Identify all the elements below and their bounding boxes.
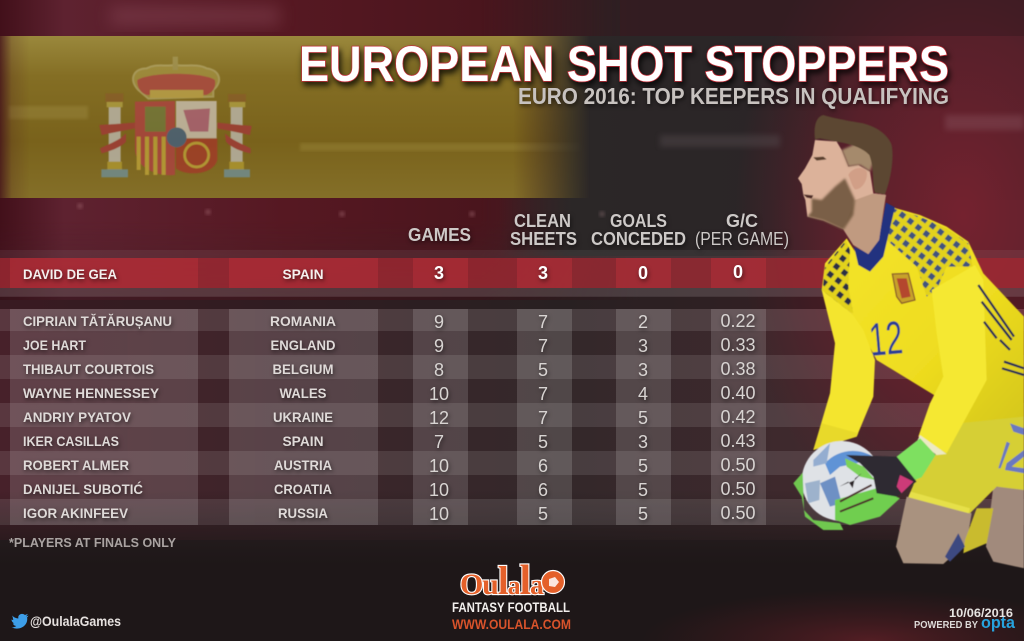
row: Hennessey: 10 xyxy=(429,384,449,404)
hair xyxy=(815,115,893,194)
right arm xyxy=(918,265,987,453)
row: Subotić: 5 xyxy=(638,480,648,500)
hair fade xyxy=(842,143,875,172)
row: Subotić: CROATIA xyxy=(274,481,332,497)
icon: football xyxy=(542,570,564,594)
shirt number 12: 12 xyxy=(867,311,905,366)
cuff highlight xyxy=(813,423,858,450)
row: Pyatov: ANDRIY PYATOV xyxy=(23,409,132,425)
table column cells xyxy=(10,258,766,525)
row: Courtois: BELGIUM xyxy=(272,361,334,377)
row: Almer: 10 xyxy=(429,456,449,476)
eye xyxy=(813,157,827,161)
row: Courtois: THIBAUT COURTOIS xyxy=(23,361,154,377)
left glove wrist xyxy=(897,438,936,480)
row: Hart: 9 xyxy=(434,336,444,356)
row: Courtois xyxy=(23,359,756,380)
row: Hennessey: WAYNE HENNESSEY xyxy=(23,385,160,401)
row: Hart: 7 xyxy=(538,336,548,356)
header: clean sheets xyxy=(510,211,577,249)
twitter handle: @OulalaGames xyxy=(30,614,121,629)
row: Casillas: IKER CASILLAS xyxy=(23,433,119,449)
website: WWW.OULALA.COM xyxy=(452,616,571,632)
legs xyxy=(896,487,1024,568)
row: Hart: JOE HART xyxy=(23,337,86,353)
row: Akinfeev: 5 xyxy=(638,504,648,524)
row: Akinfeev: 0.50 xyxy=(720,503,756,523)
header: goals conceded: GOALS xyxy=(610,211,667,231)
neck shadow xyxy=(843,193,886,254)
header: goals conceded: CONCEDED xyxy=(591,229,686,249)
header: goals conceded xyxy=(591,211,686,249)
spanish flag yellow band xyxy=(0,36,590,198)
row: Akinfeev xyxy=(23,503,756,524)
glove back xyxy=(846,455,917,497)
header: games: GAMES xyxy=(408,225,471,245)
row: Akinfeev: IGOR AKINFEEV xyxy=(23,505,129,521)
row: Tătărușanu: 7 xyxy=(538,312,548,332)
header: clean sheets: SHEETS xyxy=(510,229,577,249)
row: Tătărușanu: 9 xyxy=(434,312,444,332)
row: Pyatov: 5 xyxy=(638,408,648,428)
ball logo xyxy=(839,473,862,488)
mouth xyxy=(803,194,813,199)
shorts xyxy=(908,413,1024,513)
pillars xyxy=(99,93,252,177)
header: goals per game: (PER GAME) xyxy=(695,229,789,249)
row: Hennessey: 4 xyxy=(638,384,648,404)
row: Almer: ROBERT ALMER xyxy=(23,457,129,473)
row: Casillas: 7 xyxy=(434,432,444,452)
neck and face xyxy=(798,140,886,254)
row: Hart xyxy=(23,335,756,356)
row: Hart: 0.33 xyxy=(720,335,756,355)
chest mesh xyxy=(822,208,973,313)
collar xyxy=(854,203,895,272)
highlighted row: David De Gea: 0 xyxy=(638,263,648,283)
highlighted row: David De Gea: DAVID DE GEA xyxy=(23,266,117,282)
icon: twitter bird xyxy=(11,614,29,629)
adidas stripes xyxy=(978,285,1024,375)
header: goals per game: G/C xyxy=(726,211,758,231)
row: Hart: 3 xyxy=(638,336,648,356)
highlighted row: David De Gea: SPAIN xyxy=(282,266,324,282)
glove fingers xyxy=(793,458,900,530)
row: Pyatov: 7 xyxy=(538,408,548,428)
row: Casillas xyxy=(23,431,756,452)
table headers xyxy=(408,211,789,249)
logo: Oulala: Oulala xyxy=(460,558,544,604)
crest badge xyxy=(892,273,915,303)
row: Tătărușanu: 0.22 xyxy=(720,311,756,331)
row: Subotić: 6 xyxy=(538,480,548,500)
row: Pyatov: 0.42 xyxy=(720,407,756,427)
row: Pyatov: UKRAINE xyxy=(273,409,333,425)
title: EUROPEAN SHOT STOPPERS xyxy=(299,36,949,92)
header: clean sheets: CLEAN xyxy=(514,211,571,231)
ball xyxy=(802,441,882,521)
row: Akinfeev: 5 xyxy=(538,504,548,524)
row: Almer: 5 xyxy=(638,456,648,476)
row: Casillas: 5 xyxy=(538,432,548,452)
row: Almer: 0.50 xyxy=(720,455,756,475)
row: Tătărușanu: CIPRIAN TĂTĂRUȘANU xyxy=(23,313,172,329)
logo: opta: opta xyxy=(981,613,1016,632)
right cuff xyxy=(917,435,947,455)
header: goals per game xyxy=(695,211,789,249)
shirt torso xyxy=(822,207,1024,423)
subtitle: EURO 2016: TOP KEEPERS IN QUALIFYING xyxy=(518,83,949,109)
row: Courtois: 3 xyxy=(638,360,648,380)
player: goalkeeper holding ball xyxy=(793,115,1024,568)
row: Hennessey: WALES xyxy=(280,385,326,401)
row: Hennessey: 0.40 xyxy=(720,383,756,403)
highlighted row: David De Gea: 3 xyxy=(434,263,444,283)
highlighted row: David De Gea: 0 xyxy=(733,262,743,282)
row: Pyatov xyxy=(23,407,756,428)
row: Tătărușanu: ROMANIA xyxy=(270,313,336,329)
row: Subotić: 10 xyxy=(429,480,449,500)
row: Casillas: 3 xyxy=(638,432,648,452)
date: 10/06/2016 xyxy=(949,606,1013,620)
table row stripes xyxy=(0,250,1024,525)
row: Casillas: 0.43 xyxy=(720,431,756,451)
row: Almer xyxy=(23,455,756,476)
row: Hennessey xyxy=(23,383,756,404)
beard xyxy=(807,178,855,230)
icon: spanish coat of arms xyxy=(99,57,252,177)
crown xyxy=(133,57,219,99)
highlighted row: David De Gea: 3 xyxy=(538,263,548,283)
row: Subotić: 0.50 xyxy=(720,479,756,499)
row: Casillas: SPAIN xyxy=(282,433,324,449)
row: Hart: ENGLAND xyxy=(270,337,336,353)
row: Subotić: DANIJEL SUBOTIĆ xyxy=(23,480,143,497)
row: Pyatov: 12 xyxy=(429,408,449,428)
ear xyxy=(848,168,867,189)
row: Courtois: 8 xyxy=(434,360,444,380)
table rows xyxy=(23,311,756,524)
row: Courtois: 5 xyxy=(538,360,548,380)
glove logo xyxy=(897,475,913,493)
row: Almer: 6 xyxy=(538,456,548,476)
row: Almer: AUSTRIA xyxy=(274,457,332,473)
highlighted row: David De Gea xyxy=(23,262,743,283)
row: Tătărușanu: 2 xyxy=(638,312,648,332)
left arm xyxy=(813,290,875,450)
logo tagline: FANTASY FOOTBALL xyxy=(452,599,570,615)
row: Akinfeev: RUSSIA xyxy=(278,505,328,521)
footnote: *PLAYERS AT FINALS ONLY xyxy=(9,535,176,550)
shield xyxy=(135,101,217,175)
row: Subotić xyxy=(23,479,756,500)
row: Hennessey: 7 xyxy=(538,384,548,404)
row: Akinfeev: 10 xyxy=(429,504,449,524)
powered by: POWERED BY xyxy=(914,619,978,631)
row: Tătărușanu xyxy=(23,311,756,332)
row: Courtois: 0.38 xyxy=(720,359,756,379)
